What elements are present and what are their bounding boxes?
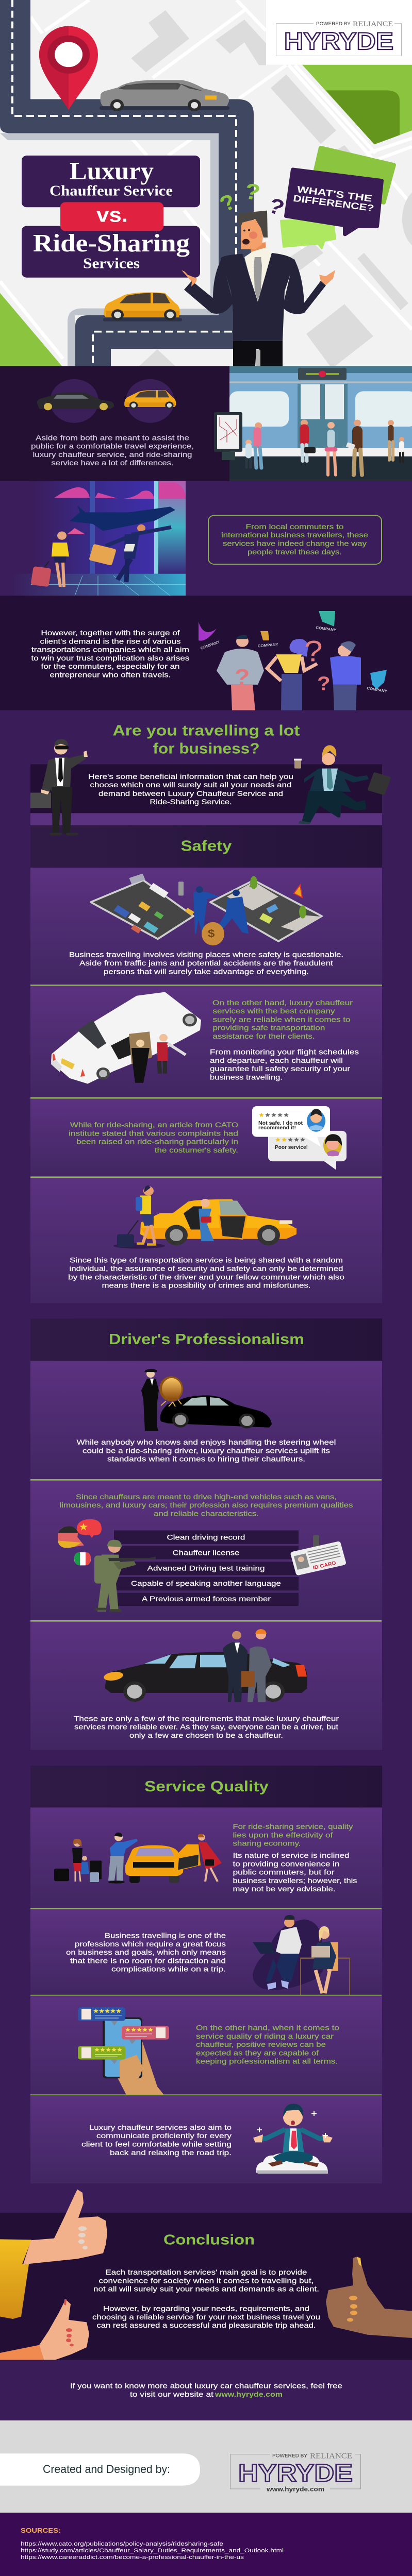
logo: Reliance: RELIANCE [353,20,393,28]
list of requirements: Capable of speaking another language [131,1580,281,1588]
hero: city map with road [0,0,412,366]
logo: Hyryde footer: www.hyryde.com [266,2486,324,2493]
logo: Hyryde footer: POWERED BY [272,2453,308,2459]
confused businessman [182,211,335,366]
text: communicate proficiently: back and relaxing the road trip. [110,2149,232,2157]
illustration: airport [10,481,186,596]
heading: are you travelling: for business? [153,740,260,757]
panel: visit website: www.hyryde.com [215,2391,283,2399]
text: great focus [66,1932,226,1973]
text: aside from both: Aside from both are meant to assist the [36,434,189,442]
text: high-end vehicles: limousines, and luxury cars; their profession also requires premium qualities [60,1502,353,1510]
illustration: yellow taxi with passengers [113,1185,296,1249]
map kiosk [214,412,242,460]
panel: beneficial information: Here's some beneficial information that can help you [88,773,293,781]
text: high-end vehicles: and reliable characteristics. [154,1510,259,1518]
title: Services: Services [83,255,140,272]
commuters [245,420,404,475]
text: chauffeur reliable [212,999,353,1041]
text: fellow commuter: Since this type of transportation service is being shared with a random [70,1257,343,1265]
text: Cato article: institute stated that various complaints had [69,1130,238,1138]
illustration: three confused people: COMPANY [257,642,278,648]
text: positive reviews: On the other hand, when it comes to [196,2024,339,2032]
title: Chauffeur Service: Chauffeur Service [50,182,173,199]
text: flight schedules: business travelling. [210,1074,283,1081]
icon: car circles [37,379,176,423]
illustration: three confused people: COMPANY [367,686,388,693]
text: surge of demand [31,630,190,679]
icon: question marks: ? [216,189,240,216]
panel heading: service quality: Service Quality [144,1778,269,1794]
title: vs.: vs. [96,203,128,226]
heading: conclusion: Conclusion [163,2232,255,2248]
logo: powered by: POWERED BY [316,21,351,27]
text: communicate proficiently: Luxury chauffeur services also aim to [89,2124,232,2132]
text: great focus: Business travelling is one of the [105,1932,226,1940]
icon: location pin [39,26,98,110]
panel: chauffeur limo safety [30,986,382,1098]
text: regarding your needs: choosing a reliable service for your next business travel you [92,2314,320,2321]
text: positive reviews: service quality of riding a luxury car [196,2032,334,2041]
text: aside from both: luxury chauffeur service, and ride-sharing [32,451,192,459]
icon: yellow car [103,292,182,321]
logo: Hyryde footer: HYRYDE [238,2459,353,2487]
illustration: three confused people: ? [235,665,250,689]
icon: thumbs up red nails [0,2299,89,2360]
illustration: man in black suit with briefcase [30,739,88,836]
text: requirements summary: services more reliable ever. As they say, everyone can be a driver, but [74,1723,338,1731]
text: flight schedules: From monitoring your flight schedules [210,1048,359,1056]
text: effectivity of sharing economy [233,1823,353,1848]
title block [22,156,200,278]
panel: beneficial information: demand between Luxury Chauffeur Service and [98,790,283,798]
text: chauffeur reliable: On the other hand, luxury chauffeur [212,999,353,1007]
review bubbles: Poor service! [275,1145,308,1150]
text: steering wheel: standards when it comes to hiring their chauffeurs. [107,1455,305,1464]
text: flight schedules [210,1048,359,1081]
logo: Hyryde footer: RELIANCE [310,2452,352,2460]
illustration: white limo with chauffeur [51,992,201,1084]
text: surge of demand: entrepreneur who often travels. [50,671,171,679]
callout: local commuters: From local commuters to [245,523,343,531]
panel: proficient communication [30,2095,382,2183]
text: chauffeur reliable: services with the best company [212,1008,335,1015]
heading: are you travelling [112,722,300,757]
list of source urls [21,2541,284,2561]
icon: grey limousine [100,80,229,111]
illustration: two people working on laptops [253,1915,350,1995]
text: positive reviews [196,2024,339,2065]
text: high-end vehicles: Since chauffeurs are meant to drive high-end vehicles such as vans, [76,1494,337,1501]
panel heading: safety [30,825,382,868]
text: fellow commuter: by the characteristic of the driver and your fellow commuter which also [68,1274,344,1281]
text: fellow commuter: individual, the assurance of security and safety can only be determined [69,1265,343,1273]
text: main goal [93,2269,319,2293]
icon: flag speech bubbles [58,1519,102,1565]
text: steering wheel: While anybody who knows and enjoys handling the steering wheel [76,1439,336,1447]
list of requirements: Advanced Driving test training [147,1565,265,1572]
text: communicate proficiently: communicate proficiently for every [96,2132,232,2140]
speech bubbles: what's the difference: DIFFERENCE? [292,194,375,214]
text: main goal: convenience for society when it comes to travelling but, [99,2277,314,2285]
trolley and woman [30,531,69,587]
icon: thumbs up dark skin [326,2257,412,2338]
illustration: three confused people: COMPANY [316,625,337,632]
text: chauffeur reliable: surely are reliable when it comes to [212,1016,351,1024]
panel: focus on business [30,1909,382,1995]
text: regarding your needs: can rest assured a successful and pleasurable trip ahead. [96,2322,316,2330]
text: flight schedules: guarantee full safety security of your [210,1065,350,1073]
text: nature of service: Its nature of service is inclined [233,1852,350,1860]
callout: local commuters: people travel these days. [248,548,342,556]
review bubbles [252,1106,347,1170]
text: communicate proficiently [81,2124,232,2157]
illustration: train station platform [214,366,412,481]
text: Cato article [69,1122,238,1155]
panel: positive reviews [30,1996,382,2095]
illustration: late businessman running [294,745,391,824]
text: nature of service: public commuters, but for [233,1869,335,1876]
icon: thumbs up yellow sleeve [0,2190,107,2319]
text: positive reviews: expected as they are capable of [196,2049,319,2057]
panel heading: driver's professionalism: Driver's Professionalism [109,1331,304,1348]
illustration: phone with review bubbles [78,2007,169,2095]
heading: sources: SOURCES: [21,2527,61,2534]
panel: visit website [0,2360,412,2420]
panel: visit website: to visit our website at [130,2391,213,2399]
panel: few are chosen [30,1622,382,1750]
text: flight schedules: and departure, each chauffeur will [210,1057,343,1065]
illustration: black limo and two bodyguards [103,1629,307,1702]
panel: chauffeur standards [30,1361,382,1480]
panel: requirements list [30,1481,382,1620]
panel: ride-sharing quality [30,1807,382,1908]
text: nature of service [233,1852,357,1893]
text: great focus: complications while on a trip. [111,1965,226,1973]
list of requirements: Clean driving record [167,1534,245,1541]
text: fellow commuter: means there is a possibility of crimes and misfortunes. [102,1282,310,1290]
text: nature of service: business travellers; however, this [233,1877,357,1885]
list of requirements: A Previous armed forces member [142,1596,271,1603]
icon: ID card: ID CARD [312,1561,337,1571]
text: chauffeur reliable: providing safe transportation [212,1024,325,1032]
list of requirements [114,1531,299,1606]
text: communicate proficiently: client to feel comfortable while setting [81,2141,232,2148]
text: nature of service: to providing convenience in [233,1860,340,1868]
panel heading: service quality [30,1766,382,1807]
illustration: three confused people: COMPANY [200,639,221,651]
pill: created and designed by [0,2453,200,2486]
text: great focus: on business and goals, which only means [66,1949,226,1957]
list of source urls: https://www.careeraddict.com/become-a-professional-chauffer-in-the-us [21,2554,244,2561]
main purple background [0,710,412,2213]
text: surge of demand: client's demand is the rise of various [40,638,180,646]
text: fellow commuter [68,1257,344,1290]
panel: beneficial information: choose which one will surely suit all your needs and [90,782,291,789]
text: surge of demand: transportations companies which all aim [31,646,189,654]
icon: ID card [290,1535,347,1575]
text: Cato article: While for ride-sharing, an article from CATO [70,1122,238,1129]
text: surge of demand: for the commuters, especially for an [41,663,179,671]
logo: Hyryde footer [230,2452,361,2493]
text: requirements summary [74,1715,339,1740]
callout: local commuters: services have indeed change the way [223,540,367,548]
panel: safety traffic [30,868,382,985]
green park areas [0,65,412,366]
text: aside from both: service have a lot of differences. [51,460,173,467]
text: main goal: Each transportation services' main goal is to provide [106,2269,307,2277]
panel: ride-sharing complaints [30,1099,382,1177]
panel: visit website: If you want to know more about luxury car chauffeur services, feel free [70,2382,342,2390]
panel: sources [0,2513,412,2576]
text: surge of demand: However, together with the surge of [41,630,180,637]
text: business travelling safety: Business travelling involves visiting places where safety is questionable. [69,951,343,959]
text: positive reviews: chauffeur, positive reviews can be [196,2041,326,2049]
illustration: traffic and robbers [91,874,322,945]
icon: question marks [216,178,288,221]
running man pointing [89,524,171,582]
list of source urls: https://www.cato.org/publications/policy-analysis/ridesharing-safe [21,2541,223,2547]
text: requirements summary: only a few are chosen to be a chauffeur. [129,1732,283,1740]
icon: question marks: ? [242,178,262,205]
icon: question marks: ? [265,193,288,221]
panel: rise of transport companies [0,596,412,710]
callout: local commuters: international business travellers, these [221,532,368,539]
text: regarding your needs: However, by regarding your needs, requirements, and [103,2305,309,2313]
panel: shared ride risks [30,1178,382,1303]
panel: airport travellers [0,481,412,596]
text: effectivity of sharing economy: sharing economy. [233,1840,301,1848]
text: business travelling safety: persons that will surely take advantage of everything. [104,968,309,976]
text: nature of service: may not be very advisable. [233,1886,335,1893]
text: great focus: that there is no room for distraction and [70,1957,226,1965]
text: great focus: professions which require a great focus [75,1940,226,1948]
text: requirements summary: These are only a few of the requirements that make luxury chauffeur [74,1715,339,1723]
title: Ride-Sharing: Ride-Sharing [33,229,190,258]
text: steering wheel [76,1439,336,1464]
text: surge of demand: to win your trust complication also arises [31,654,190,663]
text: business travelling safety [69,951,343,976]
title: Luxury: Luxury [70,157,154,185]
text: Cato article: been raised on ride-sharing particularly in [76,1138,238,1146]
speech bubbles: what's the difference [281,148,394,248]
logo box: Hyryde [266,0,412,65]
illustration: soldier [94,1540,156,1612]
list of source urls: https://study.com/articles/Chauffeur_Salary_Duties_Requirements_and_Outlook.html [21,2548,284,2554]
text: positive reviews: keeping professionalism at all terms. [196,2058,338,2065]
list of requirements: Chauffeur license [172,1549,239,1557]
text: regarding your needs [92,2305,320,2330]
illustration: three confused people: ? [317,673,331,694]
illustration: chauffeur with medal and black car [141,1369,272,1431]
illustration: three confused people: ? [304,635,323,668]
illustration: meditating businessman on cloud [253,2104,333,2174]
review bubbles: recommend it! [258,1126,296,1131]
text: main goal: not all will surely suit your needs and demands as a client. [93,2285,319,2293]
callout: local commuters [208,515,382,564]
heading: are you travelling: Are you travelling a lot [112,722,300,739]
panel: credits [0,2420,412,2513]
text: effectivity of sharing economy: For ride-sharing service, quality [233,1823,353,1831]
pill: created and designed by: Created and Designed by: [43,2463,170,2476]
text: business travelling safety: Aside from traffic jams and potential accidents are the fraudulent [79,960,333,968]
road [0,0,254,366]
text: chauffeur reliable: assistance for their clients. [212,1033,315,1041]
panel: beneficial information [30,764,382,825]
review bubbles: Not safe. I do not [258,1121,303,1126]
illustration: family with taxi [54,1833,222,1884]
speech bubbles: what's the difference: WHAT'S THE [296,184,373,204]
logo: Hyryde wordmark: HYRYDE [284,27,393,55]
illustration: traffic and robbers: $ [208,927,215,940]
panel heading: driver's professionalism [30,1318,382,1361]
text: aside from both [31,434,194,467]
text: aside from both: public for a comfortable travel experience, [31,443,194,450]
illustration: three confused people [199,611,388,710]
panel: conclusion [0,2190,412,2360]
panel: beneficial information: Ride-Sharing Service. [150,799,232,806]
text: effectivity of sharing economy: lies upon the effectivity of [233,1832,334,1839]
panel: intro differences [0,366,229,481]
text: high-end vehicles [60,1494,353,1518]
text: Cato article: the costumer's safety. [155,1147,238,1155]
panel heading: safety: Safety [180,838,232,854]
text: steering wheel: could be a ride-sharing driver, luxury chauffeur services uplift its [83,1447,330,1455]
